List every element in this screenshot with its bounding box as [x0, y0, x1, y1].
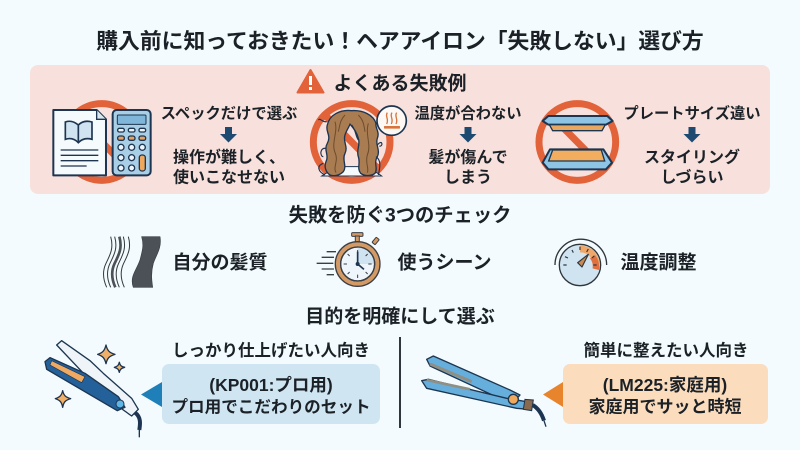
- icon: stopwatch: [317, 233, 380, 286]
- label: temperature control: 温度調整: [620, 252, 697, 274]
- callout: LM225: (LM225:家庭用): [603, 375, 727, 395]
- text block: failure 1: スペックだけで選ぶ: [161, 106, 297, 122]
- icon: temperature gauge: [555, 239, 607, 286]
- text block: failure 1: 使いこなせない: [173, 168, 285, 186]
- text block: failure 3: [623, 104, 761, 186]
- label: quick styling: 簡単に整えたい人向き: [584, 340, 748, 360]
- callout: LM225: 家庭用でサッと時短: [588, 396, 742, 416]
- text block: failure 3: スタイリング: [644, 148, 740, 166]
- icon: plates in prohibition sign: [539, 104, 616, 180]
- title: 購入前に知っておきたい！ヘアアイロン「失敗しない」選び方: [96, 28, 704, 54]
- text block: failure 2: [414, 104, 522, 186]
- icon: professional hair iron with sparkles: [45, 341, 140, 437]
- callout: KP001: [141, 364, 380, 424]
- text block: failure 1: [161, 106, 297, 186]
- icon: home hair iron: [422, 356, 546, 427]
- label: thorough finish: しっかり仕上げたい人向き: [172, 341, 370, 360]
- callout: KP001: プロ用でこだわりのセット: [171, 398, 371, 416]
- icon: damaged hair in prohibition sign: [313, 104, 406, 180]
- label: hair type: 自分の髪質: [172, 252, 268, 274]
- text block: failure 3: プレートサイズ違い: [623, 104, 761, 122]
- heading: common failures: [298, 70, 467, 94]
- callout: KP001: (KP001:プロ用): [209, 375, 333, 395]
- label: usage scene: 使うシーン: [397, 252, 492, 274]
- panel: common failures: [30, 65, 770, 194]
- divider: [399, 337, 401, 428]
- icon: hair texture: [104, 237, 160, 287]
- heading: common failures: よくある失敗例: [333, 72, 467, 94]
- text block: failure 2: 温度が合わない: [414, 104, 522, 122]
- heading: three checks: 失敗を防ぐ3つのチェック: [289, 204, 511, 226]
- text block: failure 3: しづらい: [660, 168, 724, 186]
- text block: failure 1: 操作が難しく、: [173, 148, 285, 166]
- callout: LM225: [543, 364, 768, 424]
- icon: document and calculator in prohibition sign: [53, 104, 151, 180]
- text block: failure 2: しまう: [444, 168, 492, 186]
- text block: failure 2: 髪が傷んで: [428, 148, 508, 166]
- heading: choose by purpose: 目的を明確にして選ぶ: [305, 306, 495, 328]
